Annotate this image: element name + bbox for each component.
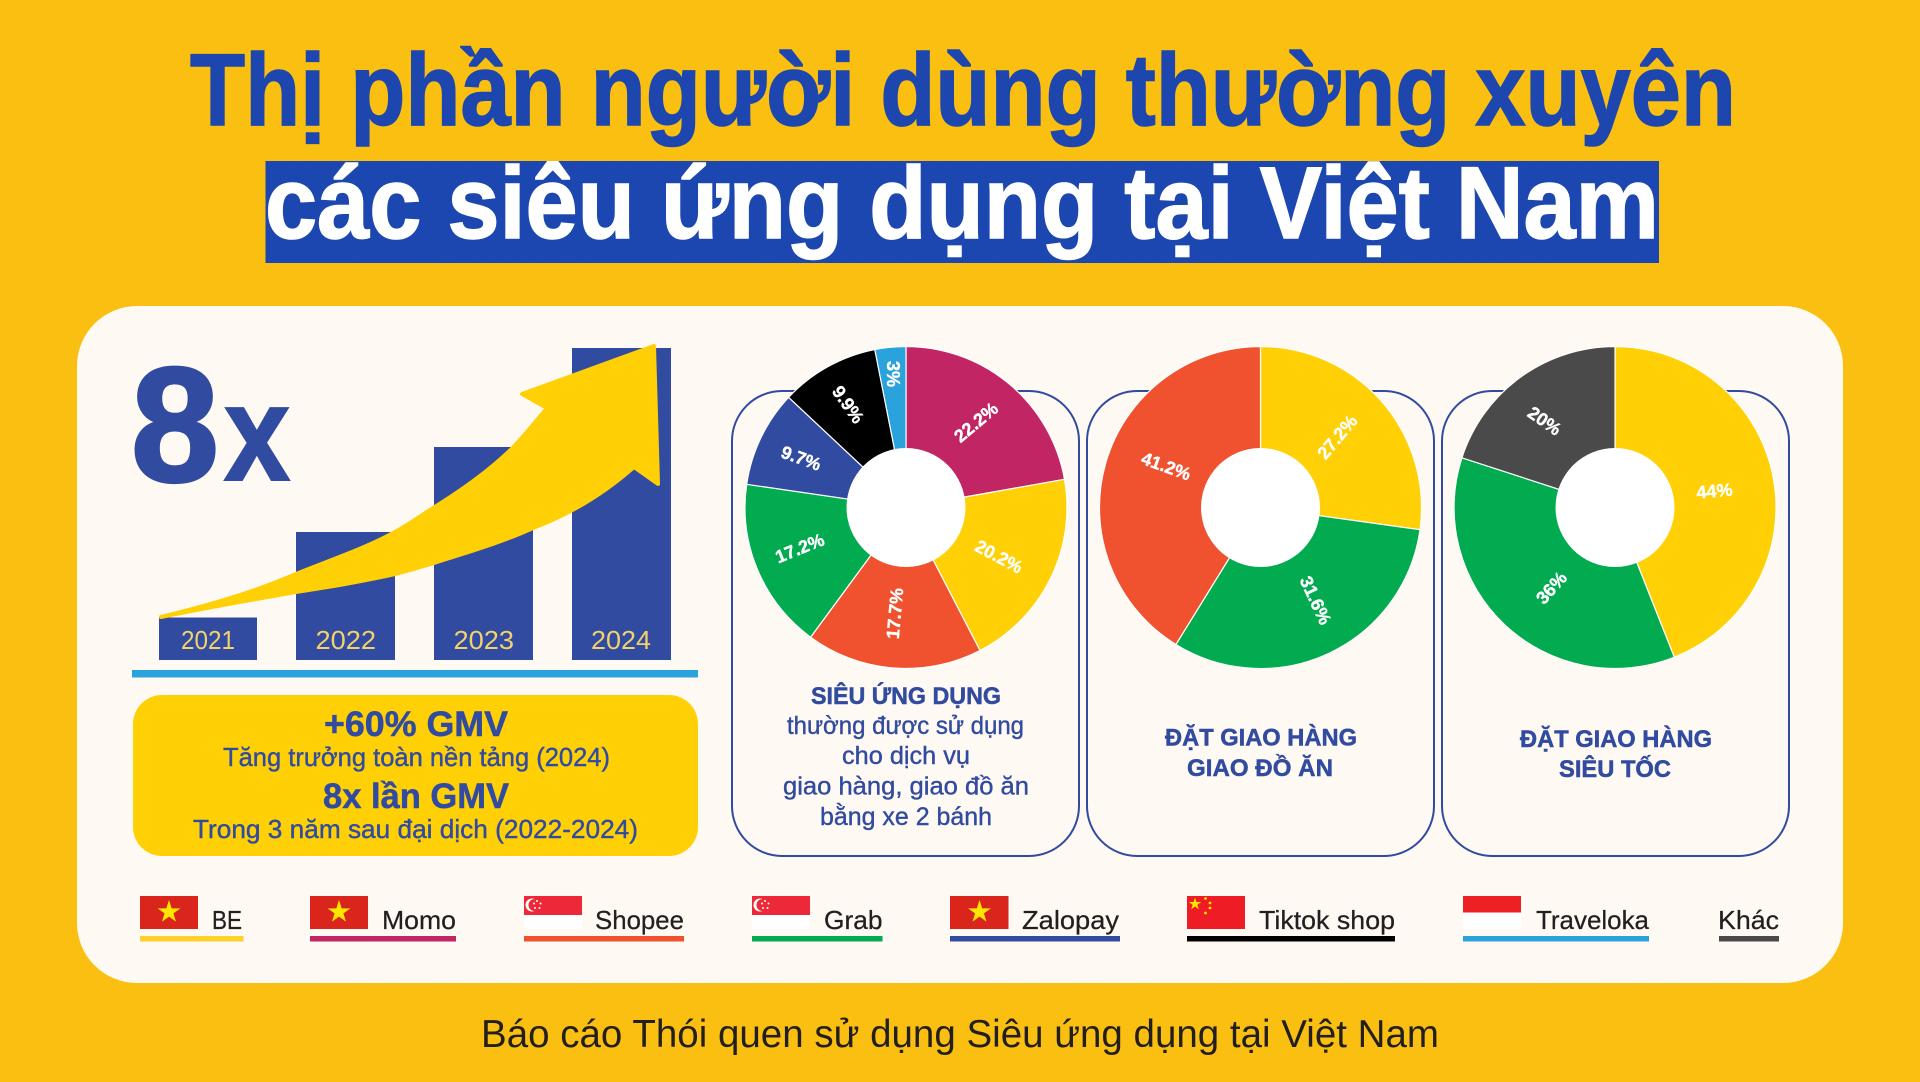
- legend: Shopee: [524, 896, 684, 942]
- super app description: thường được sử dụng: [787, 712, 1024, 740]
- year 2024: 2024: [591, 625, 651, 655]
- stat +60% GMV: +60% GMV: [324, 705, 509, 744]
- legend: Traveloka: [1463, 896, 1650, 942]
- super app percentage labels: 3%: [883, 361, 903, 387]
- growth bar chart: [132, 346, 698, 678]
- legend: BE: BE: [212, 905, 242, 935]
- panel: food delivery: [1087, 346, 1434, 856]
- legend: Khác: Khác: [1718, 905, 1779, 935]
- super app percentage labels: 9.9%: [828, 382, 868, 427]
- title: [190, 33, 1736, 263]
- express delivery percentage labels: 20%: [1524, 403, 1565, 440]
- year 2022: 2022: [316, 625, 376, 655]
- express delivery percentage labels: [1524, 403, 1733, 608]
- legend: [140, 896, 1779, 942]
- legend: Grab: Grab: [824, 905, 882, 935]
- food delivery percentage labels: 27.2%: [1313, 411, 1361, 463]
- super app description: bằng xe 2 bánh: [820, 802, 992, 831]
- legend: Shopee: Shopee: [595, 905, 684, 935]
- panel: super app: [732, 346, 1079, 856]
- food delivery percentage labels: [1139, 411, 1361, 628]
- super app percentage labels: 22.2%: [950, 398, 1002, 446]
- footer source: Báo cáo Thói quen sử dụng Siêu ứng dụng tại Việt Nam: [481, 1013, 1439, 1056]
- panel: express delivery: [1442, 346, 1789, 856]
- donut: super app: [745, 346, 1067, 669]
- express delivery heading: SIÊU TỐC: [1559, 755, 1671, 783]
- legend: Momo: [310, 896, 456, 942]
- food delivery percentage labels: 31.6%: [1296, 573, 1335, 628]
- food delivery percentage labels: 41.2%: [1139, 448, 1193, 484]
- main panel: [77, 306, 1843, 983]
- legend: Traveloka: Traveloka: [1536, 905, 1650, 935]
- food delivery heading: [1165, 724, 1357, 782]
- stat caption 2024: Tăng trưởng toàn nền tảng (2024): [223, 742, 610, 772]
- bar 2023: [434, 447, 533, 660]
- legend: Grab: [752, 896, 882, 942]
- super app percentage labels: [772, 361, 1026, 640]
- donut: express delivery: [1454, 346, 1776, 669]
- legend: Zalopay: Zalopay: [1022, 905, 1119, 935]
- arrow: growth: [161, 346, 658, 617]
- legend: Tiktok shop: Tiktok shop: [1259, 905, 1395, 935]
- super app description: [783, 712, 1029, 831]
- bar 2022: [296, 532, 395, 660]
- food delivery heading: ĐẶT GIAO HÀNG: [1165, 724, 1357, 752]
- legend: Tiktok shop: [1187, 896, 1395, 942]
- super app heading: SIÊU ỨNG DỤNG: [811, 682, 1001, 710]
- super app percentage labels: 20.2%: [972, 536, 1026, 578]
- stat caption 2022-2024: Trong 3 năm sau đại dịch (2022-2024): [193, 814, 638, 844]
- big number 8x: 8: [131, 333, 219, 516]
- express delivery heading: [1520, 725, 1712, 783]
- super app percentage labels: 17.7%: [883, 587, 907, 640]
- big number 8x: x: [224, 357, 290, 509]
- big number 8x: [131, 333, 290, 516]
- express delivery percentage labels: 36%: [1532, 568, 1571, 608]
- express delivery percentage labels: 44%: [1696, 479, 1733, 503]
- super app description: cho dịch vụ: [842, 742, 970, 770]
- title highlight bar: [266, 161, 1659, 263]
- title line 2: các siêu ứng dụng tại Việt Nam: [265, 146, 1659, 260]
- legend: BE: [140, 896, 244, 942]
- express delivery heading: ĐẶT GIAO HÀNG: [1520, 725, 1712, 753]
- bar 2021: [159, 618, 257, 660]
- bar 2024: [572, 348, 671, 660]
- title line 1: Thị phần người dùng thường xuyên: [190, 33, 1736, 147]
- donut: food delivery: [1099, 346, 1422, 669]
- legend: Zalopay: [950, 896, 1120, 942]
- legend: Momo: Momo: [382, 905, 456, 935]
- super app percentage labels: 17.2%: [772, 530, 827, 567]
- year 2023: 2023: [454, 625, 514, 655]
- year 2021: 2021: [181, 625, 235, 655]
- super app percentage labels: 9.7%: [778, 442, 824, 475]
- baseline: [132, 670, 698, 678]
- stat 8x GMV: 8x lần GMV: [323, 777, 510, 816]
- food delivery heading: GIAO ĐỒ ĂN: [1187, 754, 1333, 782]
- callout: GMV stats: [133, 695, 698, 856]
- super app description: giao hàng, giao đồ ăn: [783, 772, 1029, 800]
